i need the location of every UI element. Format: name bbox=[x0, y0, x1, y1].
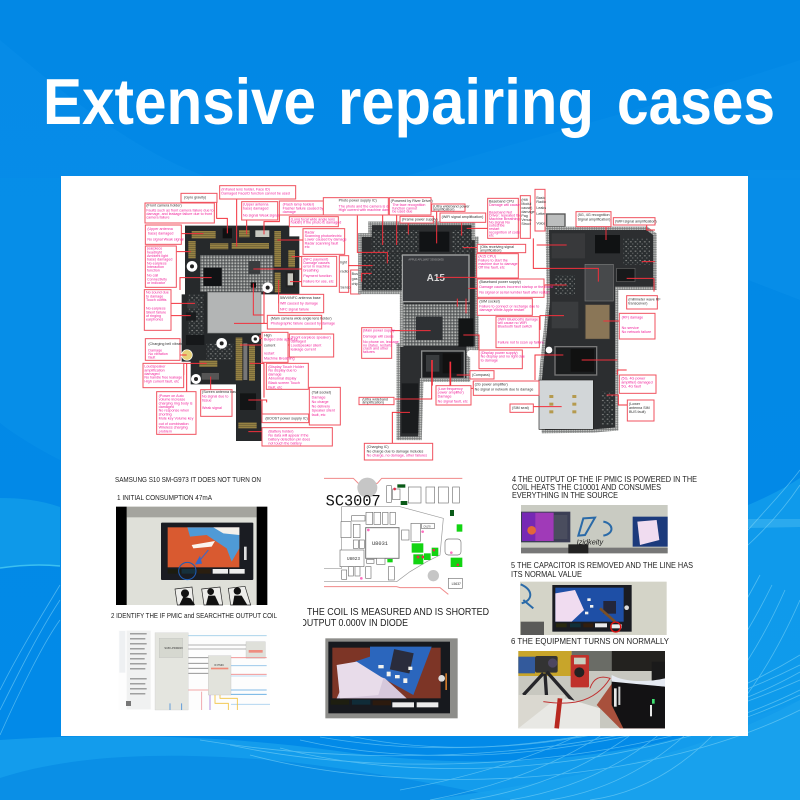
diagram: IF PMIC schematic: IF PMIC bbox=[214, 663, 224, 667]
callout: no sound: of ringing bbox=[146, 314, 161, 318]
callout: front wide angle bbox=[289, 217, 341, 227]
callout: tail socket: No delivery bbox=[312, 404, 330, 408]
callout: power on: volume increase bbox=[159, 398, 185, 402]
callout: radar: Radar scanning fault bbox=[305, 241, 338, 245]
callout: baseband power: No signal or serial number fault after restart bbox=[479, 291, 550, 295]
callout: earpiece: Connectivity bbox=[147, 277, 167, 281]
callout: nfc payments: Damage causes bbox=[303, 261, 330, 265]
callout: low frequency bbox=[436, 386, 471, 405]
callout: otg receiving: amplification) bbox=[480, 249, 502, 253]
text: step four: COIL HEATS THE C10001 AND CONSUMES bbox=[512, 483, 661, 492]
callout: A15 cpu: machine due to damage bbox=[478, 262, 518, 266]
callout: otg receiving: (Otis receiving signal bbox=[480, 245, 514, 249]
callout: earpiece: No call bbox=[147, 274, 158, 278]
callout: earpiece: (earpiece bbox=[147, 247, 162, 251]
callout: upper antenna small: base) damaged bbox=[243, 206, 268, 210]
circuit board two: A15 bbox=[427, 273, 445, 284]
heading: step six: 6 THE EQUIPMENT TURNS ON NORMALLY bbox=[511, 637, 670, 646]
callout: emmc damage bbox=[619, 313, 655, 339]
callout: baseband cpu: Damage will cause bbox=[489, 203, 520, 207]
callout: display touch bbox=[266, 363, 308, 389]
callout: 5G 4G pa bbox=[619, 375, 656, 393]
callout: main power bbox=[362, 328, 399, 358]
callout: power on: shorting bbox=[159, 412, 172, 416]
callout: front earpiece bbox=[289, 334, 334, 357]
heading: step three bbox=[303, 608, 489, 626]
callout: earpiece: or indicator bbox=[147, 281, 166, 285]
photo: step six bench bbox=[518, 651, 665, 728]
callout: display touch: Black screen Touch bbox=[268, 381, 300, 385]
callout: narrow eject: chip bbox=[352, 282, 358, 286]
callout: no sound: No sound due bbox=[146, 291, 169, 295]
callout: sim socket: Failure to connect or recharge due to bbox=[479, 304, 539, 308]
callout: display touch: (Display Touch Holder bbox=[268, 365, 305, 369]
callout: display touch: fault, etc bbox=[268, 385, 282, 389]
callout: emmc damage: No service bbox=[622, 326, 639, 330]
callout: A15 cpu: Failure to start the bbox=[478, 258, 508, 262]
callout: 5G recognition: Signal amplification) bbox=[578, 218, 610, 222]
callout: flash lamp bbox=[279, 201, 334, 215]
callout: wifi nfc: 5WVI/NFC antenna base bbox=[280, 296, 321, 300]
callout: narrow memory bbox=[535, 189, 546, 231]
callout: 2G power amp: No signal or network due to damage bbox=[475, 387, 533, 391]
callout: front earpiece: (Front earpiece speaker) bbox=[291, 335, 331, 339]
text: step five: 5 THE CAPACITOR IS REMOVED AND THE LINE HAS bbox=[511, 561, 693, 570]
callout: photo power supply bbox=[323, 198, 399, 215]
heading: step three: THE COIL IS MEASURED AND IS SHORTED bbox=[307, 607, 489, 618]
callout: baseband power: (Baseband power supply) bbox=[479, 280, 521, 284]
callout: screen antenna: (Screen antenna base) bbox=[202, 390, 239, 394]
callout: earpiece: Interaction bbox=[147, 265, 164, 269]
callout: power on: problem bbox=[159, 429, 172, 433]
callout: sim seat bbox=[510, 404, 533, 412]
callout: battery holder: (Battery holder) bbox=[268, 429, 294, 433]
callout: powered by river driver: (Powered by River Driver) bbox=[391, 199, 433, 203]
callout: nfc payments: breathing bbox=[303, 268, 319, 272]
callout: main power: Damage will cause bbox=[363, 334, 394, 338]
callout: baseband cpu: Machine Breathing bbox=[489, 217, 519, 221]
callout: main power: (Main power supply bbox=[363, 329, 395, 333]
callout: baseband power bbox=[477, 279, 553, 297]
callout: low frequency: Damage bbox=[438, 394, 451, 398]
callout: no sound bbox=[144, 290, 171, 330]
callout: emmc damage: No network failure bbox=[622, 330, 651, 334]
callout: main camera wide: Photographic failure caused by damage bbox=[271, 322, 335, 326]
callout: powered by river driver: The face recognition bbox=[392, 203, 425, 207]
callout: millimeter wave bbox=[627, 296, 661, 309]
callout: screen antenna: tissue bbox=[202, 398, 212, 402]
title bbox=[43, 65, 775, 138]
callout: low frequency: No signal fault, etc bbox=[438, 399, 468, 403]
heading: step three: OUTPUT 0.000V IN DIODE bbox=[300, 618, 408, 629]
heading: case title: SAMSUNG S10 SM-G973 IT DOES NOT TURN ON bbox=[115, 475, 261, 484]
callout: wifi nfc: Wifi caused by damage bbox=[280, 302, 318, 306]
callout: baseband cpu: restart bbox=[489, 227, 499, 231]
diagram: SC3007 board layout: U8023 bbox=[347, 557, 360, 562]
callout: wifi bluetooth: Failure not to scan up failure bbox=[498, 340, 544, 344]
photo: step four thermal: Izidkeity bbox=[577, 537, 604, 546]
callout: upper antenna small: No signal Weak signal bbox=[243, 214, 279, 218]
callout: power on: Mute key Volume key bbox=[159, 417, 194, 421]
callout: 2G power amp bbox=[473, 381, 539, 395]
callout: gyro: (Gyro gravity) bbox=[184, 196, 206, 200]
callout: loudspeaker: amplification bbox=[144, 368, 165, 372]
callout: flash lamp: damage bbox=[283, 210, 296, 214]
callout: baseband cpu: Baseband CPU bbox=[489, 199, 515, 203]
callout: narrow light: radio bbox=[340, 269, 348, 273]
callout: upper antenna base: (Upper antenna bbox=[147, 227, 174, 231]
callout: power on: out of combination bbox=[159, 422, 189, 426]
title: cases bbox=[617, 65, 775, 138]
callout: compass bbox=[470, 371, 494, 379]
callout: infrared lens: (Infrared lens holder, Face ID) bbox=[221, 188, 270, 192]
callout: main camera wide bbox=[267, 315, 335, 329]
callout: battery holder: No data will appear if the bbox=[268, 433, 309, 437]
callout: baseband power: Damage causes incorrect startup or the boost bbox=[479, 285, 553, 289]
callout: wifi bluetooth: will cause no WiFi bbox=[498, 321, 527, 325]
callout: display power: (Display power supply) bbox=[481, 351, 518, 355]
callout: narrow memory: Leaks bbox=[536, 206, 546, 210]
callout: charging bell: fault bbox=[148, 356, 155, 360]
callout: power on: Wireless charging bbox=[159, 426, 188, 430]
circuit board two bbox=[360, 223, 477, 438]
callout: power on: (Power on Auto bbox=[159, 394, 184, 398]
callout: no sound: No earpiece bbox=[146, 307, 166, 311]
callout: flash lamp: Flasher failure caused by bbox=[283, 206, 324, 210]
title: Extensive bbox=[43, 65, 316, 138]
diagram: SC3007 board layout bbox=[324, 478, 462, 594]
callout: front earpiece: damaged bbox=[291, 339, 306, 343]
callout: nfc payments: Failure for use, etc bbox=[303, 280, 334, 284]
callout: high current: Machine Breathing bbox=[264, 357, 294, 361]
callout: photo power supply: Photo power supply IC) bbox=[339, 199, 377, 203]
callout: tail socket: (Tail socket) bbox=[312, 390, 331, 394]
text: step four: EVERYTHING IN THE SOURCE bbox=[512, 491, 618, 500]
callout: sim socket: (SIM socket) bbox=[479, 300, 500, 304]
callout: narrow light bbox=[339, 256, 353, 292]
callout: charging IC: (Charging IC) bbox=[367, 445, 389, 449]
callout: narrow eject: gas bbox=[352, 277, 358, 281]
callout: screen antenna bbox=[201, 390, 239, 416]
leader lines bbox=[171, 199, 303, 432]
callout: nfc payments: error in machine bbox=[303, 265, 330, 269]
callout: main power: no status, restarts bbox=[363, 343, 392, 347]
callout: ultra wideband amp bbox=[359, 397, 394, 405]
callout: narrow wifi memory: damage bbox=[521, 210, 535, 214]
callout: otg receiving bbox=[477, 244, 526, 253]
callout: earpiece bbox=[145, 246, 176, 287]
callout: high current: current bbox=[264, 343, 275, 347]
text: step four bbox=[512, 475, 697, 500]
callout: display touch: No display due to bbox=[268, 369, 297, 373]
diagram: SC3007 board layout: U8031 bbox=[372, 541, 388, 547]
callout: lower antenna bbox=[627, 400, 654, 421]
callout: sim seat: (SIM seat) bbox=[512, 406, 529, 410]
callout: front earpiece: leakage current bbox=[291, 347, 316, 351]
callout: wifi amplification right bbox=[613, 218, 657, 225]
callout: power on bbox=[157, 392, 196, 434]
callout: lower antenna: (Lower bbox=[629, 402, 641, 406]
callout: display power: No display and no light due bbox=[481, 355, 525, 359]
callout: lower antenna: BUS fault) bbox=[629, 410, 646, 414]
callout: earpiece: function bbox=[147, 269, 160, 273]
callout: flash lamp: (Flash lamp holder) bbox=[283, 203, 314, 207]
photo: step three coil bbox=[325, 638, 458, 718]
circuit board three bbox=[539, 214, 655, 432]
callout: power on: damaged bbox=[159, 405, 174, 409]
diagram: IF PMIC schematic: SUB LPDDR4X bbox=[164, 646, 183, 650]
callout: infrared lens: Damaged FaceID function cannot be used bbox=[221, 192, 290, 196]
leader lines bbox=[348, 212, 655, 443]
callout: narrow eject bbox=[351, 270, 360, 294]
callout: battery holder bbox=[262, 428, 332, 446]
callout: sim socket: damage While Apple restart bbox=[479, 308, 524, 312]
callout: upper antenna base: base) damaged bbox=[148, 231, 173, 235]
callout: screen antenna: Weak signal bbox=[202, 406, 222, 410]
callout: narrow wifi memory: Struct bbox=[521, 222, 531, 226]
callout: power on: charging ring body is bbox=[159, 401, 193, 405]
SC3007 label: SC3007 bbox=[326, 493, 381, 511]
callout: narrow wifi memory: Venus bbox=[521, 218, 532, 222]
callout: baseband cpu: Driver: repeated the bbox=[489, 214, 521, 218]
callout: main power: failures bbox=[363, 350, 375, 354]
callout: A15 cpu bbox=[477, 254, 518, 278]
text: step five bbox=[511, 561, 693, 579]
diagram: SC3007 board layout: CN178 bbox=[423, 526, 431, 528]
callout: loudspeaker: damaged bbox=[144, 372, 160, 376]
callout: ultra wideband: (Ultra wideband power bbox=[433, 204, 470, 208]
callout: ultra wideband amp: (Ultra wideband bbox=[362, 398, 388, 402]
callout: radar: Radar bbox=[305, 230, 315, 234]
callout: frame power: (Frame power supply) bbox=[402, 218, 438, 222]
callout: low frequency: (Low frequency bbox=[438, 387, 463, 391]
callout: front wide angle: (Long focal wide angle lens bbox=[291, 217, 335, 221]
text: step five: ITS NORMAL VALUE bbox=[511, 570, 582, 579]
callout: front camera: (Front camera holder) bbox=[146, 204, 182, 208]
callout: compass: (Compass) bbox=[472, 373, 490, 377]
callout: millimeter wave: transceiver) bbox=[628, 301, 647, 305]
callout: powered by river driver bbox=[389, 198, 433, 215]
callout: wifi nfc bbox=[279, 294, 324, 313]
callout: charging bell: (Charging bell vibrate) bbox=[148, 342, 184, 346]
callout: ultra wideband: amplification) bbox=[433, 207, 455, 211]
callout: narrow memory: Voice bbox=[536, 221, 545, 225]
callout: front camera bbox=[145, 203, 214, 223]
callout: nfc payments: (NFC payment) bbox=[303, 257, 328, 261]
callout: narrow wifi memory bbox=[520, 196, 535, 238]
photo: step four thermal bbox=[521, 505, 668, 553]
panel: boards two and three annotated bbox=[323, 189, 661, 460]
callout: 2G power amp: (2G power amplifier) bbox=[475, 383, 508, 387]
callout: narrow memory: Radio bbox=[536, 200, 546, 204]
callout: display touch: damage bbox=[268, 372, 282, 376]
callout: no sound: to damage bbox=[146, 294, 163, 298]
callout: wifi bluetooth: Bluetooth fault switch bbox=[498, 324, 532, 328]
callout: loudspeaker: High current fault, etc bbox=[144, 379, 179, 383]
callout: loudspeaker: No handle free leakage bbox=[144, 376, 182, 380]
callout: baseband cpu: Baseband Not bbox=[489, 210, 512, 214]
panel: white sheet bbox=[61, 176, 748, 736]
callout: battery holder: battery detection pin does bbox=[268, 437, 310, 441]
callout: no sound: Silent failure bbox=[146, 310, 166, 314]
callout: narrow light: Sensor bbox=[340, 285, 353, 289]
callout: narrow wifi memory: cause) bbox=[521, 206, 532, 210]
callout: charging IC bbox=[364, 443, 433, 460]
callout: tail socket: Speaker silent bbox=[312, 409, 335, 413]
callout: front camera: damage, and leakage failure due to front bbox=[146, 212, 212, 216]
callout: wifi amplification bbox=[440, 213, 486, 222]
callout: wifi bluetooth bbox=[496, 317, 544, 348]
callout: upper antenna base bbox=[145, 225, 184, 244]
callout: main power: crash and other bbox=[363, 347, 389, 351]
callout: loudspeaker bbox=[143, 363, 184, 388]
diagram: SC3007 board layout: L5637 bbox=[452, 582, 461, 586]
callout: narrow memory: Letter bbox=[536, 212, 546, 216]
callout: radar: Scanning photoelectric bbox=[305, 234, 342, 238]
callout: 5G 4G pa: 5G, 4G fault bbox=[621, 384, 641, 388]
callout: upper antenna small bbox=[242, 202, 279, 220]
panel: board one annotated bbox=[143, 186, 360, 446]
callout: narrow eject: Bus bbox=[352, 272, 358, 276]
callout: A15 cpu: Off line fault, etc bbox=[478, 266, 505, 270]
callout: charging IC: No charge due to damage includes bbox=[367, 449, 424, 453]
callout: earpiece: Ambient light bbox=[147, 254, 168, 258]
callout: narrow wifi memory: (Hifi bbox=[521, 198, 528, 202]
callout: frame power bbox=[400, 216, 438, 223]
callout: radar bbox=[303, 229, 347, 254]
callout: front camera: camera failure bbox=[146, 216, 170, 220]
callout: sim socket bbox=[477, 299, 539, 315]
callout: front wide angle: holder) If the photo is damaged bbox=[291, 221, 341, 225]
callout: tail socket: fault, etc bbox=[312, 413, 326, 417]
callout: powered by river driver: function cannot bbox=[392, 206, 417, 210]
callout: wifi amplification right: (WiFi signal amplification) bbox=[615, 220, 657, 224]
callout: earpiece: base) damaged bbox=[147, 258, 172, 262]
callout: baseband cpu: subscribe bbox=[489, 224, 505, 228]
title: repairing bbox=[338, 65, 594, 138]
callout: photo power supply: High current with machine damage bbox=[339, 208, 395, 212]
callout: loudspeaker: Loudspeaker bbox=[144, 365, 166, 369]
text: step four: 4 THE OUTPUT OF THE IF PMIC IS POWERED IN THE bbox=[512, 475, 697, 484]
callout: baseband cpu: etc bbox=[489, 234, 494, 238]
callout: 5G recognition bbox=[576, 212, 611, 227]
callout: radar: Lower caused by damage bbox=[305, 238, 347, 242]
heading: step one: 1 INITIAL CONSUMPTION 47mA bbox=[117, 493, 212, 502]
callout: main camera wide: (Main camera wide angle lens holder) bbox=[271, 316, 332, 320]
callout: 5G 4G pa: (5G, 4G power bbox=[621, 376, 646, 380]
callout: charging bell: No vibration bbox=[148, 352, 168, 356]
callout: lower antenna: antenna SIM bbox=[629, 406, 650, 410]
callout: boost: (BOOST power supply IC) bbox=[265, 417, 308, 421]
callout: A15 cpu: (A15 CPU) bbox=[478, 255, 496, 259]
callout: boost bbox=[262, 414, 309, 423]
heading: step two: 2 IDENTIFY THE IF PMIC and SEARCHTHE OUTPUT COIL bbox=[111, 611, 277, 620]
callout: 5G 4G pa: amplifier) damaged bbox=[621, 380, 653, 384]
callout: high current: Bulged side aperture bbox=[264, 337, 298, 341]
callout: 5G recognition: (5G, 4G recognition bbox=[578, 213, 610, 217]
callout: narrow wifi memory: Modul bbox=[521, 202, 531, 206]
callout: narrow light: light bbox=[340, 261, 347, 265]
callout: wifi bluetooth: (WiFi Bluetooth) damage bbox=[498, 318, 538, 322]
callout: front camera: Faults such as front camera failure due to bbox=[146, 208, 214, 212]
callout: emmc damage: (RF) damage bbox=[622, 315, 643, 319]
callout: no sound: earphones bbox=[146, 318, 163, 322]
callout: tail socket: Damage bbox=[312, 396, 325, 400]
callout: powered by river driver: be used due bbox=[392, 210, 412, 214]
callout: ultra wideband bbox=[432, 204, 470, 211]
callout: photo power supply: The photo and the camera is damage bbox=[339, 204, 399, 208]
callout: no sound: Touch outfits bbox=[146, 298, 167, 302]
callout: main power: No phone on, leakage bbox=[363, 340, 399, 344]
callout: charging bell bbox=[145, 339, 184, 360]
callout: charging IC: No charge, no damage, other failures bbox=[367, 454, 427, 458]
callout: wifi amplification: (WiFi signal amplification) bbox=[442, 215, 483, 219]
photo: step one monitor bbox=[116, 507, 267, 605]
callout: narrow memory: Basic bbox=[536, 196, 545, 200]
callout: battery holder: not touch the battery bbox=[268, 441, 302, 445]
callout: nfc payments: Payment function bbox=[303, 274, 332, 278]
callout: narrow wifi memory: Pag bbox=[521, 214, 528, 218]
callout: tail socket bbox=[309, 387, 340, 425]
callout: infrared lens bbox=[220, 186, 296, 199]
callout: baseband cpu bbox=[488, 198, 521, 238]
callout: charging bell: Damage bbox=[148, 348, 162, 352]
callout: power on: No response when bbox=[159, 409, 189, 413]
callout: screen antenna: No signal due to bbox=[202, 395, 228, 399]
callout: display power bbox=[479, 350, 525, 369]
callout: upper antenna small: (Upper antenna bbox=[243, 203, 269, 207]
photo: step five capacitor bbox=[520, 582, 667, 635]
callout: baseband cpu: No signal No bbox=[489, 220, 510, 224]
callout: gyro bbox=[181, 193, 217, 202]
diagram: IF PMIC schematic bbox=[118, 630, 270, 710]
callout: wifi nfc: NFC signal failure bbox=[280, 307, 309, 311]
circuit board one bbox=[182, 226, 299, 441]
circuit board two: APPLE APL1W07 339S00835 bbox=[408, 258, 444, 262]
callout: high current: restart bbox=[264, 351, 274, 355]
callout: upper antenna base: No signal Weak signal bbox=[147, 238, 184, 242]
callout: low frequency: power amplifier) bbox=[438, 391, 464, 395]
callout: earpiece: headlight bbox=[147, 250, 162, 254]
callout: radar: etc bbox=[305, 245, 310, 249]
callout: earpiece: No earpiece bbox=[147, 261, 167, 265]
callout: tail socket: No charge bbox=[312, 400, 329, 404]
callout: display power: to damage bbox=[481, 358, 498, 362]
callout: millimeter wave: (millimeter wave RF bbox=[628, 297, 661, 301]
callout: front earpiece: Loudspeaker silent bbox=[291, 343, 321, 347]
callout: high current: High bbox=[264, 333, 272, 337]
callout: high current bbox=[262, 332, 298, 362]
callout: ultra wideband amp: amplification) bbox=[362, 401, 384, 405]
callout: display touch: Abnormal display bbox=[268, 377, 297, 381]
callout: baseband cpu: recognition of code bbox=[489, 230, 520, 234]
callout: nfc payments bbox=[302, 256, 337, 286]
